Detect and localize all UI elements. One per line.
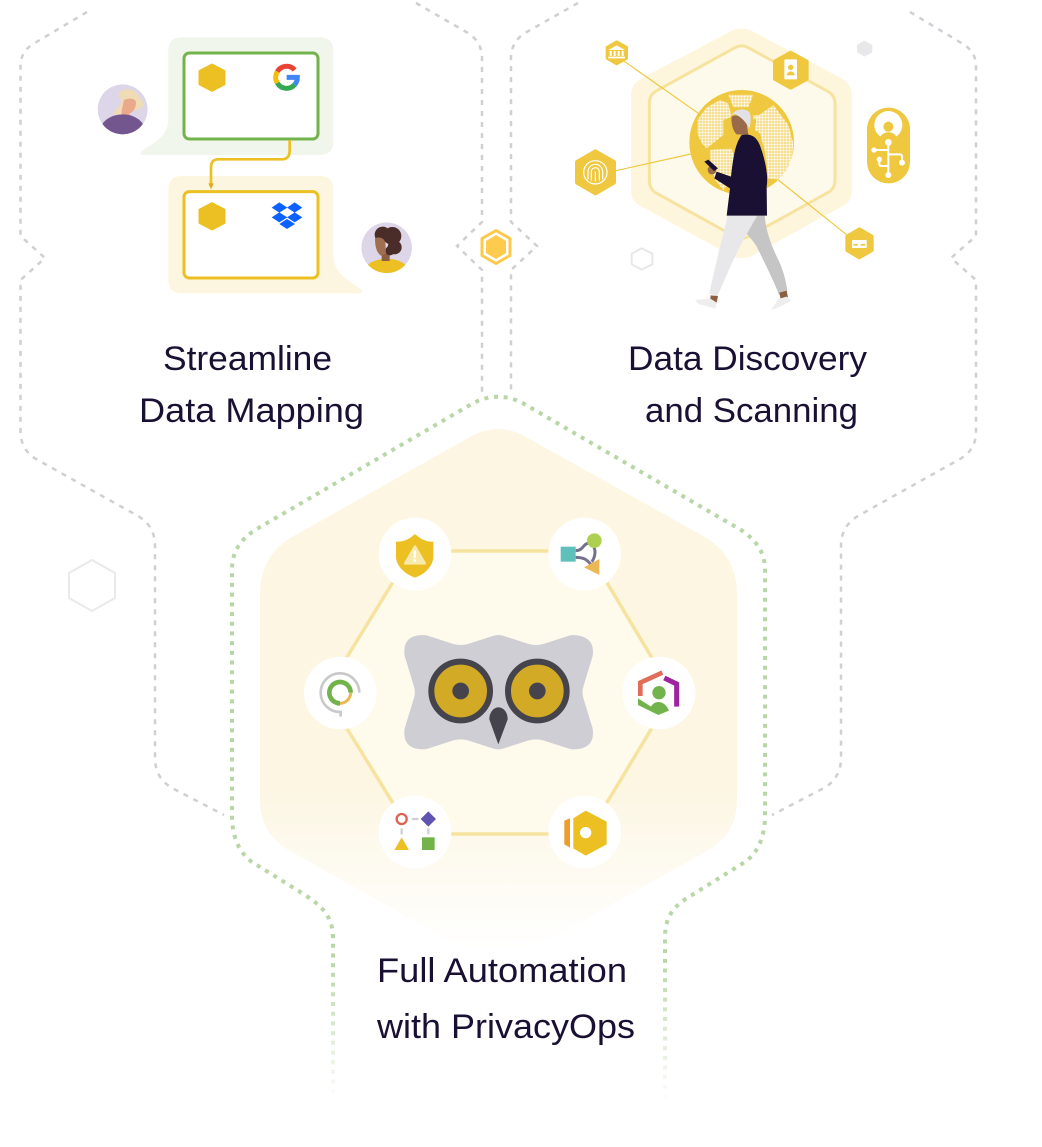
dashed outline: data discovery panel [511,3,976,815]
network connector lines [325,551,673,834]
green card [184,53,318,139]
hexagon icon: dropbox card [199,203,225,230]
icon: bank hexagon [607,42,627,64]
node: workflow shapes [379,796,451,868]
inner hexagon ring [649,46,835,238]
lower hexagon fade [260,790,737,952]
hexagon icon: google card [199,64,225,91]
node: hexagon user [623,657,695,729]
node: hexagon target [548,796,621,868]
heading: full automation with privacyops [376,952,635,1046]
person walking [695,109,792,310]
icon: dropbox [272,202,302,229]
connector lines [616,61,847,235]
green speech bubble [140,37,333,155]
icon: fingerprint hexagon [577,151,614,193]
outer pale hexagon [631,28,852,258]
decorative gray hexagon [857,41,872,57]
node: flow shapes [548,518,621,590]
panel: data discovery and scanning [577,28,910,310]
heading: streamline data mapping [139,340,364,430]
panel: streamline data mapping [98,37,412,293]
icon: google [276,66,297,88]
globe [689,90,794,195]
avatar: blonde person [98,84,148,134]
node: circular progress [304,657,377,729]
upper hexagon fill [260,429,737,790]
yellow card [184,192,318,278]
connector arrow [208,140,290,189]
dotted green outline [232,397,765,1103]
owl [404,635,593,749]
heading: streamline data mapping: Data Mapping [139,392,364,430]
avatar: curly-haired person [362,222,412,273]
dashed outline: data mapping panel [20,3,482,815]
heading: full automation with privacyops: with PrivacyOps [376,1008,635,1046]
heading: streamline data mapping: Streamline [163,340,332,378]
lighter inner hexagon [325,551,673,834]
center connector hexagon [482,230,510,264]
heading: data discovery and scanning [628,340,867,430]
heading: data discovery and scanning: Data Discovery [628,340,867,378]
decorative hexagon outline [69,560,115,611]
icon: card hexagon [847,229,872,258]
panel: full automation with privacyops [232,397,765,1103]
yellow speech bubble [168,176,362,293]
decorative gray hexagon outline [632,248,652,270]
icon: identity network pill [867,108,910,183]
node: alert shield [379,518,451,590]
icon: id badge hexagon [775,52,807,88]
icon nodes [304,518,695,868]
heading: data discovery and scanning: and Scanning [645,392,858,430]
heading: full automation with privacyops: Full Automation [377,952,627,990]
